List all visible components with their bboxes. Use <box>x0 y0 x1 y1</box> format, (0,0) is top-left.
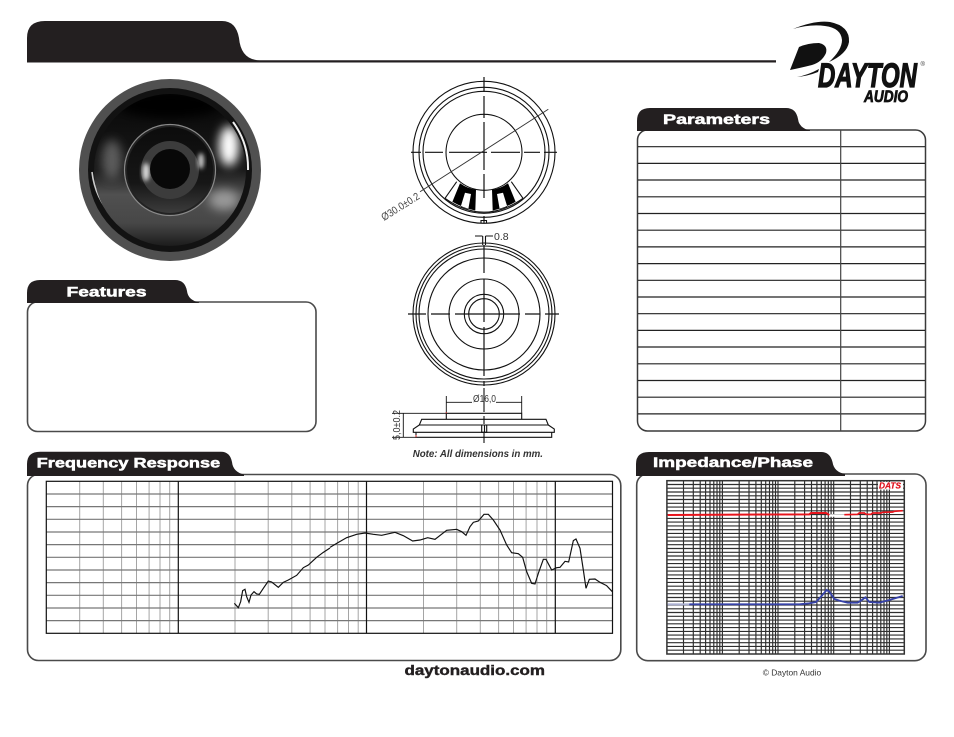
notch <box>481 220 486 223</box>
panel: impedance and phase <box>636 452 926 661</box>
level grid lines <box>46 494 612 621</box>
parameters table column divider <box>840 130 842 431</box>
parameters table rows <box>638 147 925 414</box>
panel: frequency response <box>27 452 621 660</box>
logo: Dayton Audio <box>790 22 926 106</box>
minor frequency grid lines <box>80 481 547 633</box>
highlight arcs <box>233 122 248 170</box>
side view centre detail <box>482 388 487 443</box>
diameter leader <box>420 109 548 192</box>
frequency heading: Frequency Response <box>37 456 221 471</box>
parameters tab <box>637 108 810 131</box>
red tick marks <box>416 412 446 437</box>
horizontal grid <box>667 484 904 650</box>
technical drawing: front view <box>379 77 557 224</box>
chart frame <box>667 481 904 654</box>
diameter label: Ø30.0±0.2 <box>379 191 422 224</box>
technical drawing: rear view <box>408 231 559 386</box>
side view profile <box>413 413 554 437</box>
features panel box <box>28 302 316 432</box>
speaker photo <box>79 79 261 261</box>
response curve right <box>330 514 612 592</box>
height label: 5,0±0.2 <box>391 410 403 440</box>
front view centre lines <box>411 77 557 223</box>
parameters heading: Parameters <box>663 112 770 127</box>
phase trace gap <box>829 514 845 517</box>
registered mark: ® <box>920 61 926 68</box>
copyright: © Dayton Audio <box>763 668 821 678</box>
website address: daytonaudio.com <box>404 663 545 678</box>
impedance heading: Impedance/Phase <box>653 455 814 470</box>
header band <box>27 21 776 62</box>
response curve left <box>234 548 330 608</box>
frequency tab <box>27 452 244 476</box>
note: dimensions: Note: All dimensions in mm. <box>413 449 543 460</box>
terminal spokes <box>445 182 523 212</box>
surround <box>79 79 261 261</box>
technical drawing: side view <box>391 388 554 443</box>
panel: parameters <box>637 108 926 431</box>
rear view rings <box>413 243 555 385</box>
diameter dimension <box>446 396 522 413</box>
parameters table box <box>638 130 926 431</box>
logo sub-wordmark: AUDIO <box>863 87 908 106</box>
diameter 16 label: Ø16,0 <box>473 393 496 405</box>
dust cap <box>150 149 190 189</box>
terminal block <box>452 183 516 210</box>
features tab <box>27 280 199 303</box>
height dimension <box>392 413 446 437</box>
phase trace: blue <box>689 590 903 604</box>
frequency panel box <box>28 474 621 660</box>
panel: features <box>27 280 316 432</box>
impedance chart <box>667 481 904 654</box>
logo swoosh <box>790 22 849 77</box>
rear view centre lines <box>408 245 559 386</box>
DATS mark: DATS <box>879 482 902 490</box>
width dimension 0.8 <box>475 236 493 245</box>
decade lines and frame <box>178 481 555 633</box>
centre cone <box>124 124 216 216</box>
front view rings <box>413 81 555 223</box>
features heading: Features <box>66 284 146 300</box>
impedance trace: red <box>668 513 829 515</box>
width label: 0.8 <box>494 231 509 243</box>
frequency response chart <box>46 481 612 633</box>
vertical grid <box>684 481 889 654</box>
impedance panel box <box>637 474 926 661</box>
dome <box>94 94 246 246</box>
impedance tab <box>636 452 845 476</box>
phase trace: pale blue <box>668 601 689 607</box>
